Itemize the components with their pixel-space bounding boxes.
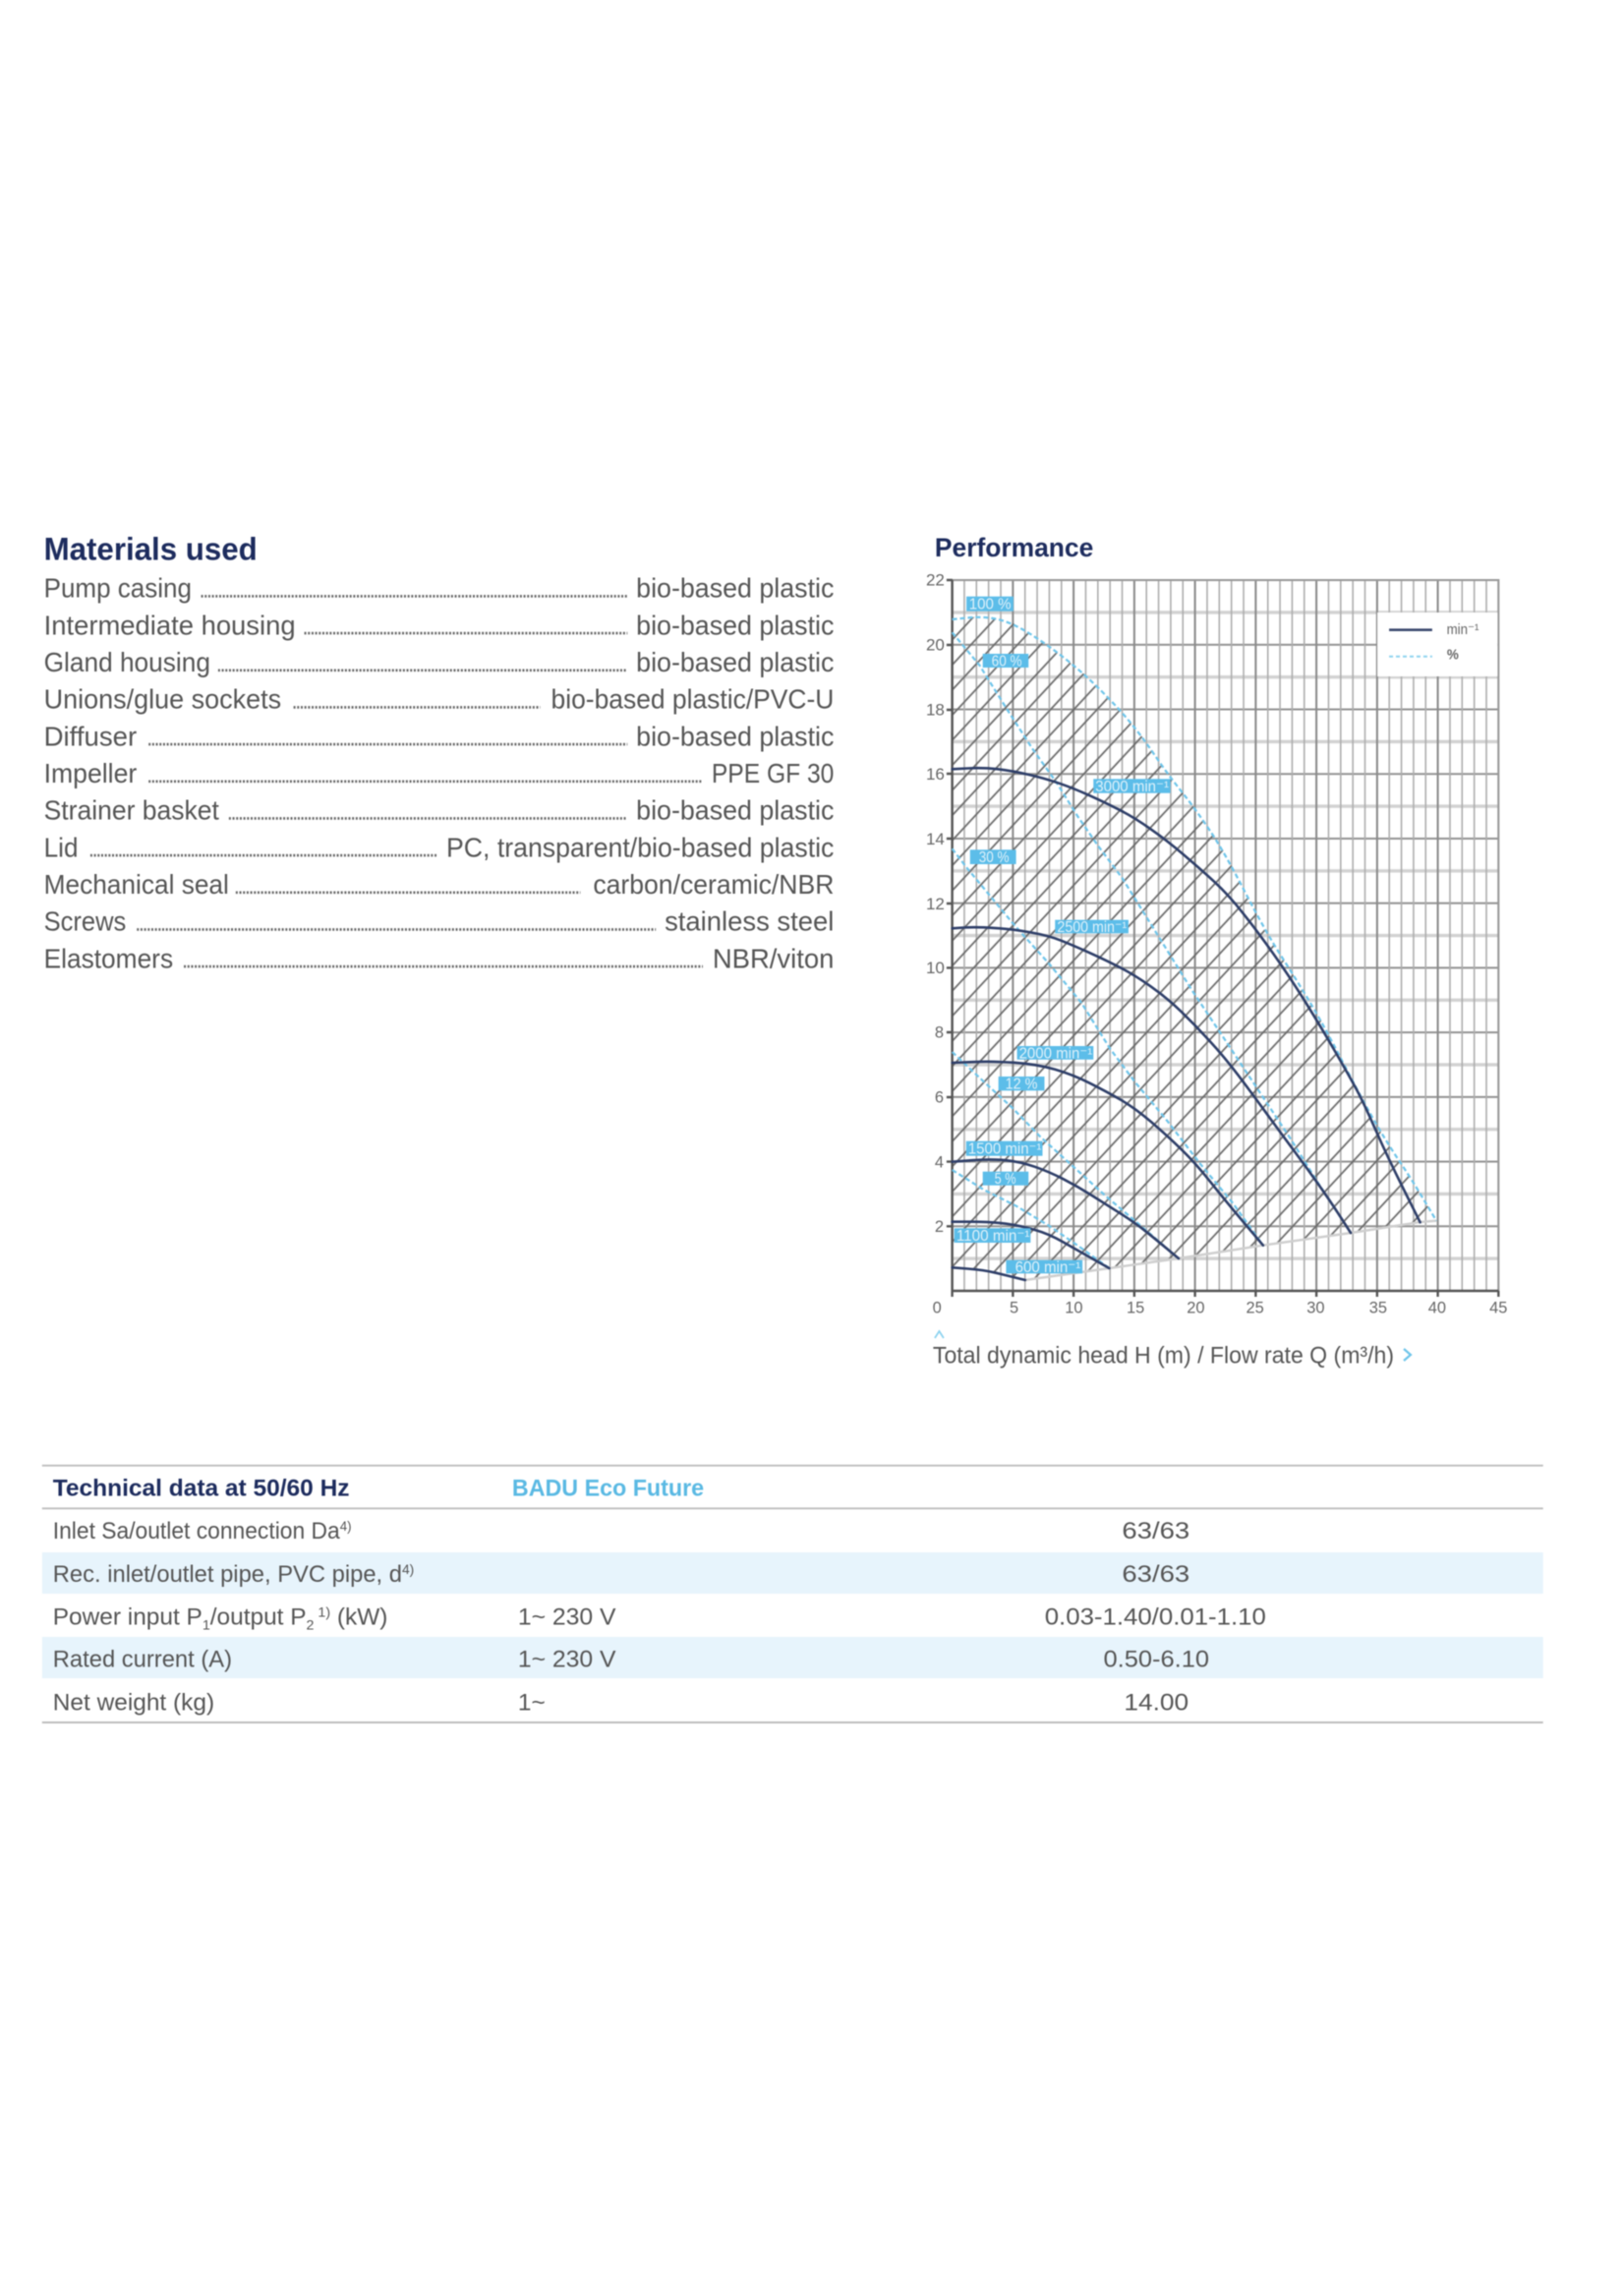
icon: up chevron xyxy=(935,1331,944,1338)
row: lid: PC, transparent/bio-based plastic xyxy=(446,832,834,862)
x axis labels: 45 xyxy=(1489,1300,1507,1317)
row: inlet/outlet connection: Inlet Sa/outlet connection Da xyxy=(53,1518,353,1545)
label: 1500 rpm: 1500 min⁻¹ xyxy=(968,1141,1041,1158)
row: mechanical seal xyxy=(44,869,834,900)
row: power: 2 xyxy=(307,1616,315,1632)
label: 3000 rpm: 3000 min⁻¹ xyxy=(1095,779,1169,795)
row: power: 0.03-1.40/0.01-1.10 xyxy=(1045,1603,1266,1630)
row: net weight: 1~ xyxy=(518,1689,546,1716)
icon: right chevron xyxy=(1404,1349,1411,1361)
y axis labels: 22 xyxy=(926,572,945,590)
label: 1100 rpm: 1100 min⁻¹ xyxy=(957,1228,1030,1245)
table header: BADU Eco Future xyxy=(512,1476,704,1502)
x axis labels: 15 xyxy=(1127,1300,1144,1317)
speed curve 2000 xyxy=(953,1062,1263,1246)
row: gland housing xyxy=(44,647,834,677)
y axis labels: 8 xyxy=(935,1024,944,1042)
row: lid: Lid xyxy=(44,832,78,862)
panel: materials used xyxy=(44,531,834,973)
y axis labels: 4 xyxy=(935,1153,944,1171)
label: 2500 rpm: 2500 min⁻¹ xyxy=(1057,919,1127,936)
label: 600 rpm: 600 min⁻¹ xyxy=(1015,1259,1080,1276)
y axis labels: 16 xyxy=(926,766,945,784)
row: elastomers: Elastomers xyxy=(44,943,173,973)
row: strainer basket: bio-based plastic xyxy=(636,795,834,826)
row: inlet/outlet connection: 4) xyxy=(340,1518,352,1534)
row: rated current: Rated current (A) xyxy=(53,1647,232,1673)
table rules xyxy=(42,1466,1543,1508)
row: power: 1~ 230 V xyxy=(518,1603,616,1630)
row: screws: Screws xyxy=(44,906,126,937)
row: intermediate housing: Intermediate housing xyxy=(44,610,296,640)
y axis labels: 20 xyxy=(926,637,945,655)
row: strainer basket: Strainer basket xyxy=(44,795,219,826)
efficiency curve 100% xyxy=(953,617,1436,1221)
panel: performance chart xyxy=(926,533,1507,1370)
table header: Technical data at 50/60 Hz xyxy=(53,1476,350,1502)
x axis labels: 20 xyxy=(1187,1300,1204,1317)
speed curve 1500 xyxy=(953,1159,1179,1258)
label: 5% xyxy=(983,1171,1028,1188)
x axis labels: 10 xyxy=(1065,1300,1082,1317)
row: pump casing: bio-based plastic xyxy=(636,573,834,604)
y axis labels: 18 xyxy=(926,702,945,720)
table bottom rule xyxy=(42,1721,1543,1723)
label: 30%: 30 % xyxy=(979,849,1010,866)
label: 100%: 100 % xyxy=(969,597,1012,613)
label: 60%: 60 % xyxy=(992,653,1022,670)
row: mechanical seal: Mechanical seal xyxy=(44,869,229,900)
panel: technical data table xyxy=(42,1466,1543,1722)
row: intermediate housing: bio-based plastic xyxy=(636,610,834,640)
efficiency curve 5% xyxy=(953,1170,1109,1268)
x axis labels xyxy=(933,1300,1507,1317)
y axis labels xyxy=(926,572,945,1236)
row: power: 1) xyxy=(314,1603,330,1619)
row: lid xyxy=(44,832,834,862)
row: unions/glue sockets xyxy=(44,684,834,715)
y axis labels: 2 xyxy=(935,1218,944,1236)
row: gland housing: Gland housing xyxy=(44,647,210,677)
row: net weight xyxy=(53,1689,1189,1716)
heading: performance: Performance xyxy=(935,533,1093,562)
y axis labels: 12 xyxy=(926,896,945,913)
row: impeller xyxy=(44,758,834,788)
row: rated current xyxy=(53,1647,1209,1673)
row: elastomers: NBR/viton xyxy=(713,943,834,973)
row: power xyxy=(53,1603,1266,1632)
row: recommended pipe: 63/63 xyxy=(1122,1561,1189,1588)
row: impeller: PPE GF 30 xyxy=(712,758,834,788)
heading: materials used: Materials used xyxy=(44,531,258,566)
label: 5%: 5 % xyxy=(995,1171,1016,1188)
row: diffuser: bio-based plastic xyxy=(636,721,834,751)
axis title: Total dynamic head H (m) / Flow rate Q (m³/h) xyxy=(933,1343,1394,1370)
row: pump casing xyxy=(44,573,834,604)
row: net weight: Net weight (kg) xyxy=(53,1689,214,1716)
x axis labels: 5 xyxy=(1010,1300,1018,1317)
operating area hatching xyxy=(953,616,1436,1280)
row: power: Power input P xyxy=(53,1603,200,1630)
x axis labels: 35 xyxy=(1369,1300,1387,1317)
label: 12%: 12 % xyxy=(1006,1077,1038,1093)
row: recommended pipe: 4) xyxy=(402,1561,414,1577)
speed curve 1100 xyxy=(953,1222,1109,1268)
row: power: /output P xyxy=(210,1603,307,1630)
row: rated current: 1~ 230 V xyxy=(518,1647,616,1673)
speed curve 2500 xyxy=(953,927,1351,1233)
row: inlet/outlet connection: 63/63 xyxy=(1122,1518,1189,1545)
label: 2000 rpm: 2000 min⁻¹ xyxy=(1019,1045,1092,1062)
row: net weight: 14.00 xyxy=(1124,1689,1189,1716)
row: power: (kW) xyxy=(330,1603,387,1630)
y axis labels: 14 xyxy=(926,831,945,848)
row: diffuser: Diffuser xyxy=(44,721,137,751)
efficiency curve 30% xyxy=(953,848,1263,1246)
row: unions/glue sockets: bio-based plastic/PVC-U xyxy=(551,684,834,715)
row: screws xyxy=(44,906,834,937)
row: intermediate housing xyxy=(44,610,834,640)
stripe: row 2 xyxy=(42,1552,1543,1594)
axes xyxy=(947,580,1498,1297)
row: pump casing: Pump casing xyxy=(44,573,192,604)
efficiency curve 12% xyxy=(953,1052,1179,1258)
x axis labels: 0 xyxy=(933,1300,942,1317)
speed curve 600 xyxy=(953,1267,1025,1280)
y axis labels: 6 xyxy=(935,1089,944,1107)
row: elastomers xyxy=(44,943,834,973)
legend: % xyxy=(1447,647,1459,664)
x axis labels: 40 xyxy=(1428,1300,1446,1317)
row: impeller: Impeller xyxy=(44,758,137,788)
row: power: 1 xyxy=(203,1616,210,1632)
legend xyxy=(1377,612,1497,676)
legend: min⁻¹ xyxy=(1447,621,1479,638)
efficiency curve 60% xyxy=(953,632,1351,1233)
row: mechanical seal: carbon/ceramic/NBR xyxy=(593,869,834,900)
chart grid xyxy=(953,580,1498,1291)
row: unions/glue sockets: Unions/glue sockets xyxy=(44,684,281,715)
y axis labels: 10 xyxy=(926,960,945,977)
table header xyxy=(53,1476,704,1502)
x axis labels: 25 xyxy=(1246,1300,1264,1317)
row: diffuser xyxy=(44,721,834,751)
row: strainer basket xyxy=(44,795,834,826)
row: recommended pipe xyxy=(53,1561,1189,1588)
stripe: row 4 xyxy=(42,1637,1543,1678)
row: gland housing: bio-based plastic xyxy=(636,647,834,677)
row: screws: stainless steel xyxy=(665,906,834,937)
row: rated current: 0.50-6.10 xyxy=(1103,1647,1209,1673)
operating area lower boundary xyxy=(1025,1221,1436,1280)
row: inlet/outlet connection xyxy=(53,1518,1189,1545)
speed curve 3000 xyxy=(953,768,1421,1222)
x axis labels: 30 xyxy=(1306,1300,1324,1317)
row: recommended pipe: Rec. inlet/outlet pipe, PVC pipe, d xyxy=(53,1561,404,1588)
